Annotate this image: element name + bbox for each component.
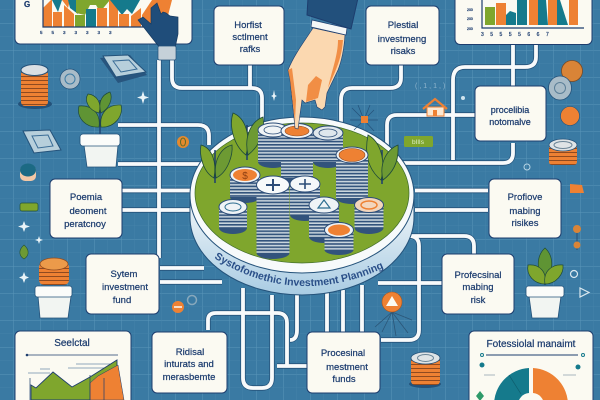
box: Profiove: mabing: [509, 206, 541, 217]
green tag label: [404, 136, 433, 147]
box: Procesial: Procesinal: [321, 348, 365, 359]
small label: (,1,1,): [415, 83, 447, 90]
box: Horfist: sctlment: [232, 32, 268, 43]
hand pointing at coins: [288, 0, 358, 129]
box: Professional: Profecsinal: [454, 270, 502, 281]
box: Ridisal: Ridisal: [176, 347, 204, 358]
box: Poemia: deoment: [70, 206, 107, 217]
platform title: Systofomethic Investment Planning: [215, 252, 384, 286]
left decor: green tag: [20, 203, 38, 211]
coin stack A: [258, 123, 288, 168]
coin stack E: [230, 167, 260, 203]
right decor: coins: [548, 60, 582, 126]
chart panel: top right: 200: [467, 17, 473, 21]
left decor: leaf: [20, 245, 28, 259]
box: Plestial: [366, 6, 439, 65]
box: System: Sytem: [111, 269, 138, 280]
box: Profiove: [489, 179, 561, 238]
coin stack J: [354, 198, 384, 234]
right decor: coin stack: [549, 139, 577, 165]
box: Horfist: rafks: [240, 44, 261, 55]
chart panel: top left: 5533333: [40, 30, 121, 35]
chart panel: top right: 35555667: [481, 32, 555, 38]
box: Ridisal: inturats and: [164, 359, 214, 370]
coin stack K: [324, 222, 354, 255]
box: Horfist: [214, 6, 284, 65]
box: Plestial: risaks: [391, 46, 416, 57]
left decor: small coin stack: [20, 164, 36, 181]
panel: Fotessiolal donut chart: Fotessiolal manaimt: [487, 339, 576, 350]
area chart: [30, 360, 124, 400]
chart panel: top left: G: [24, 0, 30, 9]
potted plant: left: [78, 92, 122, 167]
box: Professional: mabing: [462, 282, 494, 293]
chart panel: top right: 200: [467, 8, 473, 12]
panel: Seelctal chart: Seelctal: [54, 338, 90, 349]
cuff: [158, 46, 176, 60]
box: Poemia: Poemia: [70, 192, 103, 203]
potted plant: right: [526, 248, 564, 318]
shading: [288, 40, 343, 122]
box: Plestial: investmeng: [378, 34, 426, 45]
box: Profiove: Profiove: [508, 192, 542, 203]
gear icon: [172, 296, 196, 313]
chart panel: top left: [15, 0, 192, 44]
bars: [43, 0, 172, 27]
box: Ridisal: merasbemte: [163, 372, 215, 383]
box: Horfist: Horfist: [234, 20, 262, 31]
box: Procesial: [307, 332, 380, 393]
left decor: coin: [60, 69, 80, 89]
donut: [494, 368, 568, 400]
coin stack G: [290, 176, 320, 221]
sleeve: [307, 0, 358, 29]
right decor: rings and tokens: [461, 96, 589, 297]
box: Poemia: peratcnoy: [64, 219, 106, 230]
box: Profiove: risikes: [512, 218, 539, 229]
box: Procelibia: procelibia: [491, 105, 529, 115]
coin stack H: [309, 197, 339, 243]
box: Procesial: mestment: [326, 362, 368, 373]
box: System: [86, 254, 159, 314]
box: Professional: risk: [471, 295, 486, 306]
sparkles and small icons: [18, 90, 277, 283]
panel: Seelctal chart: [15, 331, 131, 400]
skin: [288, 28, 345, 129]
coin stack F: [256, 176, 290, 259]
central platform with coins and plants: [190, 112, 414, 296]
coin stack E: $: [242, 171, 248, 182]
left decor: banknotes: [100, 55, 147, 83]
box: System: investment: [102, 282, 148, 293]
bottom coin stack: [409, 352, 441, 388]
coin stack D: [336, 147, 368, 204]
potted coins: left: [35, 258, 72, 318]
green tag label: bIlIs: [412, 139, 425, 146]
left decor: coin stack: [18, 64, 52, 109]
box: System: fund: [113, 295, 131, 306]
plant: right: [367, 135, 398, 184]
gloved hand: [138, 3, 178, 60]
leaves: [78, 92, 122, 134]
left decor: banknote: [23, 130, 61, 153]
leaves: [528, 248, 563, 285]
box: Poemia: [50, 179, 122, 238]
pot: [529, 296, 561, 318]
connector pipes: [118, 45, 536, 388]
left decor: coin olive: [177, 136, 189, 148]
house icon: [423, 99, 447, 116]
chart panel: top right: 200: [467, 27, 473, 31]
plant: left front: [201, 145, 232, 183]
box: Plestial: Plestial: [388, 20, 418, 31]
burst icon: [350, 105, 378, 131]
box: Procelibia: notomalve: [489, 117, 531, 127]
platform base: [190, 117, 414, 295]
plant: left back: [232, 113, 263, 160]
box: Professional: [442, 254, 514, 314]
box: Procelibia: [475, 86, 546, 141]
warning badge: [375, 292, 412, 336]
chart panel: top right: [455, 0, 592, 44]
cuff: [311, 20, 347, 35]
pot: [84, 145, 118, 167]
coin stack C: [313, 126, 343, 168]
bars: [485, 0, 578, 25]
box: Ridisal: [152, 332, 227, 393]
panel: Fotessiolal donut chart: [469, 331, 593, 400]
coin stack B: [281, 124, 313, 184]
box: Procesial: funds: [332, 374, 356, 385]
coin stack I: [219, 200, 247, 234]
